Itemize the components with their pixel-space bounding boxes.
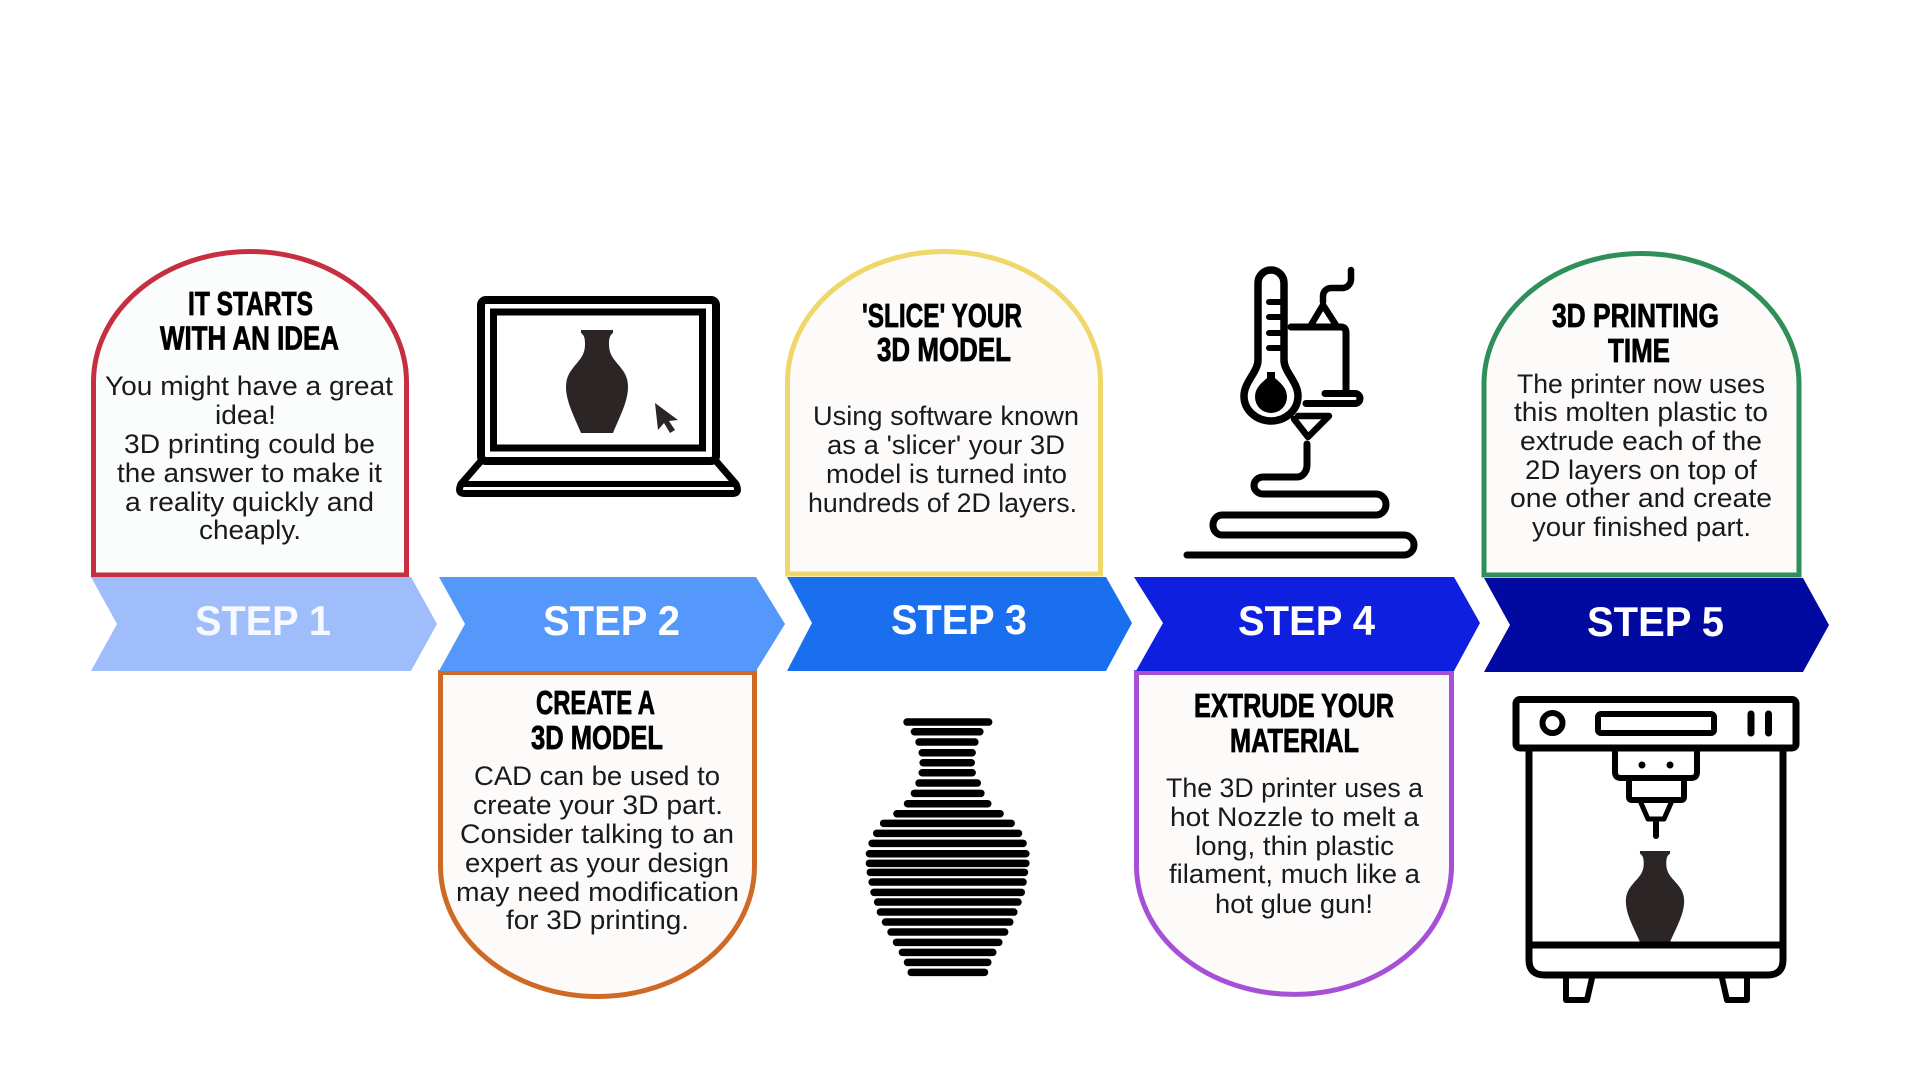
step 1 panel: it starts with an idea [94, 251, 406, 575]
extruded filament path [1187, 444, 1414, 555]
heading: it starts with an idea: IT STARTS [188, 285, 313, 322]
body text: step 3: model is turned into [826, 459, 1067, 489]
laptop base [460, 461, 737, 494]
icon: thermometer and extruder [1187, 270, 1414, 555]
body text: step 1: idea! [215, 400, 276, 430]
mouse cursor [655, 403, 678, 433]
body text: step 1: You might have a great [105, 371, 394, 401]
heading: 3D printing time [1552, 297, 1719, 369]
body text: step 5 [1510, 369, 1772, 542]
body text: step 5: The printer now uses [1517, 369, 1765, 399]
step 3 panel: slice your 3D model [788, 251, 1100, 574]
printer feet [1566, 978, 1747, 1000]
arrow: step 2 [439, 577, 785, 671]
arrow: step 3 [787, 577, 1132, 671]
body text: step 4: hot glue gun! [1215, 889, 1373, 919]
arrow: step 5: STEP 5 [1587, 598, 1724, 645]
heading: create a 3D model [531, 684, 663, 756]
panel outline: orange inverted arch [440, 672, 754, 996]
step 4 panel: extrude your material [1136, 672, 1452, 994]
printer top box [1516, 700, 1796, 748]
body text: step 2 [456, 761, 739, 935]
thermometer mercury bulb [1255, 372, 1287, 413]
heading: it starts with an idea: WITH AN IDEA [160, 320, 339, 356]
nozzle [1294, 416, 1329, 437]
body text: step 3: Using software known [813, 401, 1079, 431]
body text: step 1: cheaply. [199, 515, 301, 545]
body text: step 4 [1166, 773, 1424, 919]
step 2 panel: create a 3D model [440, 672, 754, 996]
heading: extrude your material: EXTRUDE YOUR [1194, 687, 1394, 724]
printer body [1529, 748, 1783, 975]
body text: step 2: expert as your design [465, 848, 729, 878]
body text: step 5: this molten plastic to [1514, 397, 1768, 427]
heading: extrude your material [1194, 687, 1394, 759]
icon: 3D printer [1516, 700, 1796, 1000]
heading: create a 3D model: 3D MODEL [531, 719, 663, 756]
print head [1615, 751, 1697, 778]
body text: step 3: hundreds of 2D layers. [808, 488, 1077, 518]
arrow: step 3: STEP 3 [891, 596, 1027, 643]
arrow: step 1 [91, 577, 437, 671]
body text: step 4: The 3D printer uses a [1166, 773, 1424, 803]
icon: sliced vase layers [866, 718, 1030, 976]
body text: step 5: one other and create [1510, 483, 1772, 513]
body text: step 1: a reality quickly and [125, 487, 374, 517]
printed vase [1626, 851, 1684, 942]
step 5 panel: 3D printing time [1484, 254, 1799, 575]
heading: create a 3D model: CREATE A [536, 684, 655, 721]
body text: step 1: 3D printing could be [124, 429, 375, 459]
laptop screen frame [481, 300, 716, 461]
heading: it starts with an idea [160, 285, 339, 356]
thermometer outline [1244, 270, 1298, 421]
heading: extrude your material: MATERIAL [1230, 722, 1359, 759]
body text: step 2: CAD can be used to [474, 761, 720, 791]
head mount [1629, 781, 1684, 800]
heading: 3D printing time: 3D PRINTING [1552, 297, 1719, 334]
heading: slice your 3D model: 3D MODEL [877, 331, 1011, 368]
laptop inner screen [494, 312, 702, 448]
heading: 3D printing time: TIME [1608, 332, 1670, 369]
body text: step 2: Consider talking to an [460, 819, 734, 849]
arrow: step 4 [1134, 577, 1480, 671]
arrow: step 1: STEP 1 [195, 597, 331, 644]
body text: step 5: 2D layers on top of [1525, 455, 1757, 485]
display slot [1598, 714, 1714, 733]
panel outline: red arch [94, 251, 406, 575]
thermometer ticks [1269, 302, 1281, 348]
filament input [1323, 270, 1351, 302]
arrow: step 5 [1484, 578, 1829, 672]
arrow: step 2: STEP 2 [543, 597, 680, 644]
body text: step 2: may need modification [456, 877, 739, 907]
body text: step 1: the answer to make it [117, 458, 383, 488]
panel outline: green arch [1484, 254, 1799, 575]
heater block [1306, 394, 1360, 404]
panel outline: yellow arch [788, 251, 1100, 574]
body text: step 4: hot Nozzle to melt a [1170, 802, 1420, 832]
body text: step 4: long, thin plastic [1195, 831, 1394, 861]
body text: step 2: for 3D printing. [506, 905, 689, 935]
body text: step 5: your finished part. [1532, 512, 1751, 542]
filament [1653, 822, 1659, 836]
heading: slice your 3D model: 'SLICE' YOUR [862, 297, 1022, 334]
dial [1542, 713, 1562, 733]
heading: slice your 3D model [862, 297, 1022, 368]
arrow: step 4: STEP 4 [1238, 597, 1376, 644]
control buttons [1751, 714, 1768, 733]
body text: step 3 [808, 401, 1079, 518]
panel outline: purple inverted arch [1136, 672, 1452, 994]
body text: step 4: filament, much like a [1169, 859, 1421, 889]
vase on screen [566, 330, 628, 433]
extruder cone [1311, 305, 1336, 325]
body text: step 3: as a 'slicer' your 3D [827, 430, 1065, 460]
extruder body [1291, 327, 1346, 392]
body text: step 5: extrude each of the [1520, 426, 1762, 456]
icon: laptop with vase [460, 300, 737, 494]
body text: step 2: create your 3D part. [473, 790, 723, 820]
print bed [1529, 942, 1783, 948]
body text: step 1 [105, 371, 394, 545]
nozzle [1641, 803, 1671, 819]
